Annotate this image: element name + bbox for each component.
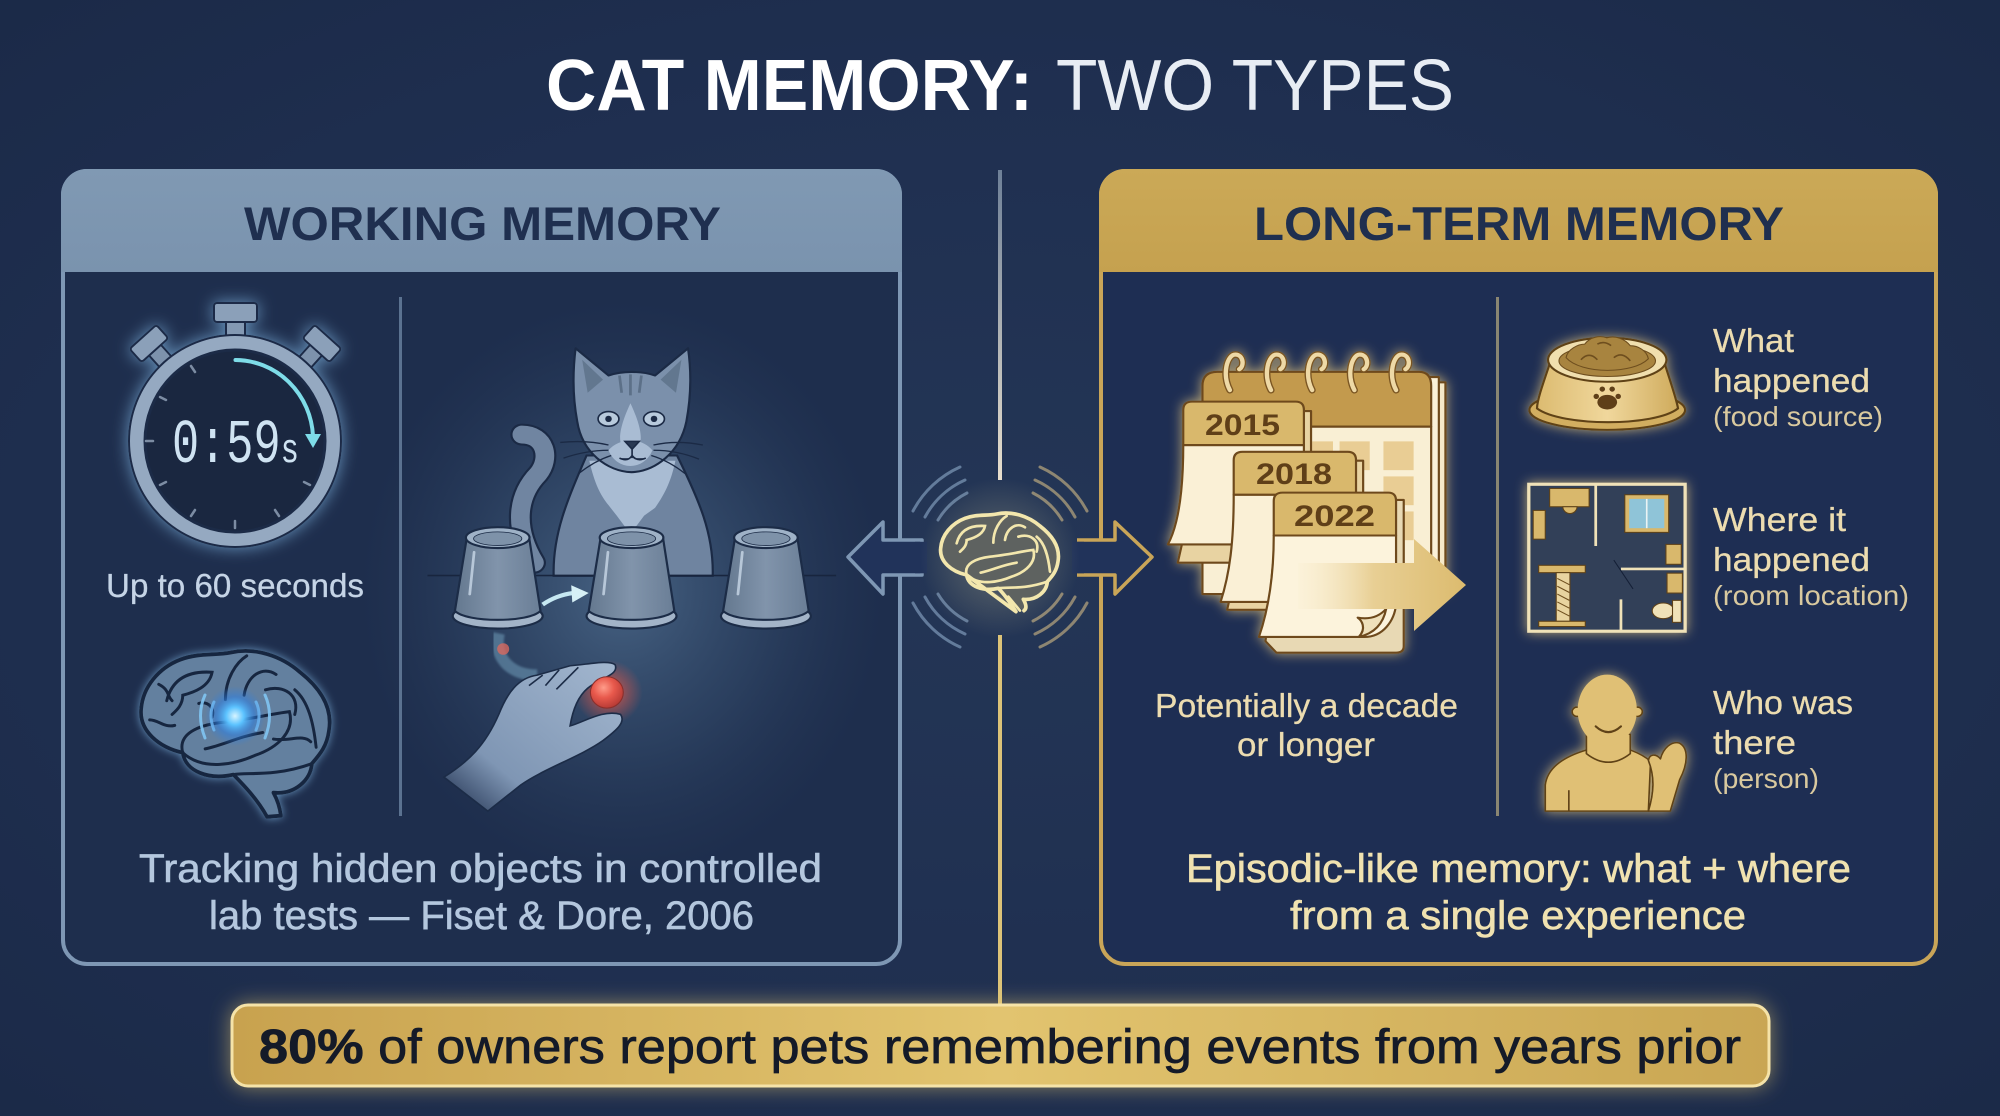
year labels: 2022 bbox=[1294, 500, 1375, 533]
icon: stopwatch bbox=[129, 303, 341, 547]
hand bbox=[444, 662, 622, 811]
icon: floor plan bbox=[1529, 484, 1685, 631]
caption: long-term memory: from a single experience bbox=[1290, 894, 1746, 938]
label: who was there bbox=[1713, 684, 1853, 794]
icon: glowing brain bbox=[141, 651, 330, 817]
label: where it happened: Where it bbox=[1713, 501, 1846, 538]
caption: working memory: Tracking hidden objects in controlled bbox=[139, 847, 822, 891]
label: who was there: (person) bbox=[1713, 763, 1819, 794]
arrow: long span of time bbox=[1298, 539, 1466, 631]
label: what happened: happened bbox=[1713, 362, 1870, 399]
label: who was there: Who was bbox=[1713, 684, 1853, 721]
label: what happened bbox=[1713, 322, 1883, 432]
ball glow bbox=[574, 660, 643, 725]
card 2015 bbox=[1168, 402, 1311, 563]
table edge bbox=[427, 575, 836, 576]
header bar: working memory bbox=[61, 169, 902, 272]
center divider line bbox=[998, 170, 1002, 1005]
label: where it happened: happened bbox=[1713, 541, 1870, 578]
caption: working memory bbox=[139, 847, 822, 938]
caption: decade bbox=[1155, 687, 1458, 763]
cups bbox=[453, 527, 811, 629]
caption: long-term memory: Episodic-like memory: what + where bbox=[1186, 847, 1851, 891]
label: what happened: (food source) bbox=[1713, 401, 1883, 432]
cat bbox=[520, 348, 713, 576]
heading: working memory: WORKING MEMORY bbox=[244, 197, 721, 250]
illustration: cat with cups and hand bbox=[427, 348, 836, 811]
glow point in brain bbox=[205, 686, 265, 746]
heading: long-term memory: LONG-TERM MEMORY bbox=[1254, 197, 1784, 250]
central brain with arrows bbox=[848, 467, 1152, 647]
card 2018 bbox=[1221, 452, 1363, 610]
label: where it happened: (room location) bbox=[1713, 580, 1909, 611]
card 2022 bbox=[1259, 493, 1404, 653]
icon: brain outline bbox=[941, 513, 1058, 612]
label: where it happened bbox=[1713, 501, 1909, 611]
arrow: to working memory bbox=[848, 522, 922, 594]
panel divider bbox=[1496, 297, 1499, 816]
title bbox=[546, 46, 1454, 126]
year labels: 2018 bbox=[1256, 458, 1332, 491]
stopwatch readout: 0:59s bbox=[172, 410, 299, 481]
title: CAT MEMORY: bbox=[546, 46, 1033, 126]
title: TWO TYPES bbox=[1056, 46, 1454, 126]
panel: working memory bbox=[61, 169, 902, 964]
caption: decade: Potentially a decade bbox=[1155, 687, 1458, 724]
year labels bbox=[1205, 409, 1375, 533]
year labels: 2015 bbox=[1205, 409, 1280, 442]
icon: food bowl bbox=[1529, 337, 1685, 430]
caption: long-term memory bbox=[1186, 847, 1851, 938]
label: who was there: there bbox=[1713, 724, 1796, 761]
callout banner: 80% of owners report pets remembering events from years prior bbox=[259, 1021, 1741, 1074]
label: what happened: What bbox=[1713, 322, 1794, 359]
header bar: long-term memory bbox=[1099, 169, 1938, 272]
spotlight behind cat bbox=[360, 300, 884, 880]
icon: calendars with years bbox=[1168, 355, 1466, 653]
panel: long-term memory bbox=[1099, 169, 1938, 964]
caption: working memory: lab tests — Fiset & Dore, 2006 bbox=[209, 894, 754, 938]
ball trail bbox=[497, 633, 537, 675]
label: up to 60 seconds: Up to 60 seconds bbox=[106, 567, 364, 604]
signal arcs bbox=[913, 467, 1087, 647]
caption: decade: or longer bbox=[1237, 726, 1375, 763]
panel divider bbox=[399, 297, 402, 816]
red ball bbox=[590, 677, 623, 708]
icon: person waving bbox=[1545, 675, 1686, 811]
arrow: cup swap bbox=[543, 585, 589, 605]
arrow: to long-term memory bbox=[1077, 522, 1152, 594]
brain glow bbox=[920, 478, 1080, 638]
callout banner bbox=[232, 1005, 1769, 1086]
